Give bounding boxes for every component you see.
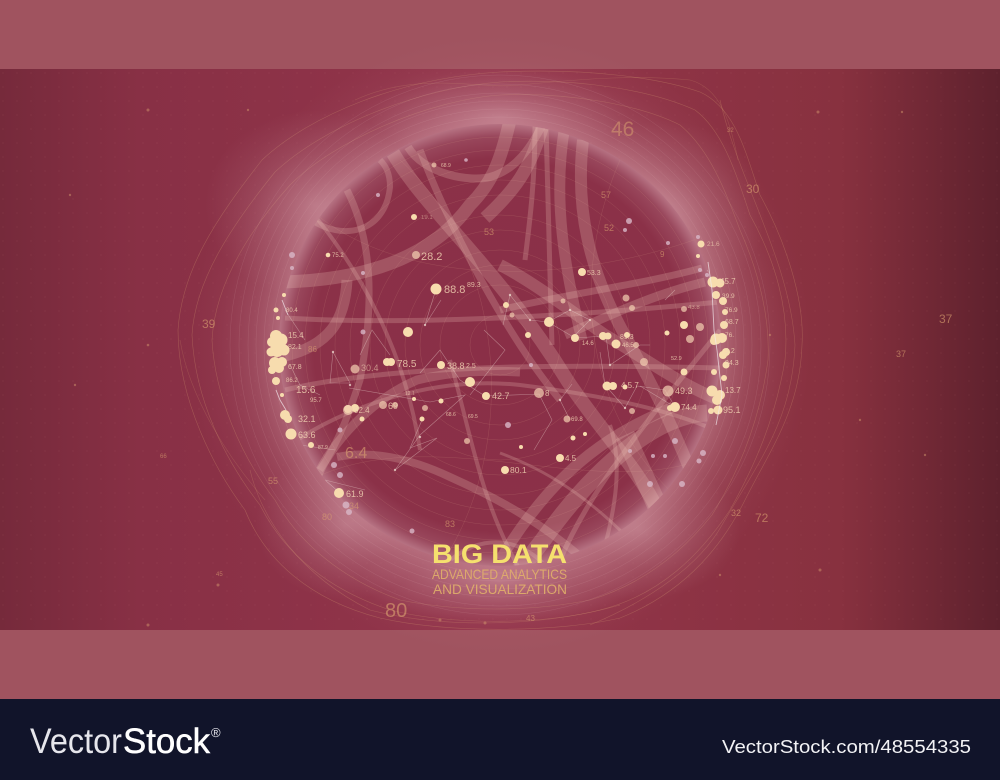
data labels: 95.1 xyxy=(723,405,741,415)
contour lines around sphere xyxy=(178,71,802,629)
data labels: 32.1 xyxy=(298,414,316,424)
small scattered specks xyxy=(69,108,926,626)
data labels: 87.9 xyxy=(318,445,328,451)
title block: Big Data xyxy=(432,539,567,597)
data labels: 80.1 xyxy=(510,465,527,475)
data labels: 30.4 xyxy=(361,363,379,373)
floating numbers: 32 xyxy=(727,128,734,134)
data nodes xyxy=(308,214,688,498)
data labels: 45.7 xyxy=(720,277,736,286)
data labels: 68.7 xyxy=(725,319,739,326)
data labels: 75.2 xyxy=(332,253,344,259)
footer bar xyxy=(0,699,1000,780)
data labels: 9.2 xyxy=(725,348,735,355)
footer logo: VectorStock xyxy=(30,722,221,761)
glow highlights xyxy=(205,70,765,622)
data labels: 68.6 xyxy=(446,412,456,418)
data labels: 76.9 xyxy=(725,307,738,314)
data labels: 39.9 xyxy=(722,293,735,300)
data labels: 76. xyxy=(725,332,734,339)
sparkle streaks on sphere edges xyxy=(276,262,722,425)
data labels: 4.5.7 xyxy=(621,381,639,390)
data labels: 8 xyxy=(545,389,550,398)
data labels: 38.8 xyxy=(447,361,465,371)
floating numbers: 37 xyxy=(896,349,906,359)
network links xyxy=(275,270,716,493)
data labels: 78.5 xyxy=(397,359,417,370)
floating numbers: 72 xyxy=(755,511,769,525)
floating numbers: 83 xyxy=(445,519,455,529)
sphere interior xyxy=(275,120,740,570)
floating numbers: 53 xyxy=(484,227,494,237)
floating numbers: 39 xyxy=(202,317,216,331)
data labels: 80.4 xyxy=(286,308,298,314)
footer logo: VectorStock: ® xyxy=(211,725,221,740)
data labels xyxy=(286,163,741,499)
data labels: 13.7 xyxy=(725,386,741,395)
data labels: 52.9 xyxy=(671,356,682,362)
floating numbers: 86 xyxy=(308,345,317,354)
data labels: 28.2 xyxy=(421,251,442,263)
data labels: 63.6 xyxy=(298,430,316,440)
data labels: 88.8 xyxy=(444,284,465,296)
data labels: 2.5 xyxy=(466,363,476,370)
data labels: 15.6 xyxy=(296,385,316,396)
data labels: 49.3 xyxy=(675,386,693,396)
data labels: 95.7 xyxy=(310,398,322,404)
floating numbers: 66 xyxy=(160,454,167,460)
floating numbers: 55 xyxy=(268,476,278,486)
data labels: 94.3 xyxy=(725,360,739,367)
curved translucent bands xyxy=(283,120,740,570)
footer image id: VectorStock.com/48554335 xyxy=(722,737,971,757)
subtitle: AND VISUALIZATION xyxy=(433,581,567,597)
data labels: 42.7 xyxy=(492,391,510,401)
floating numbers: 43 xyxy=(526,614,535,623)
data labels: 12.1 xyxy=(405,391,415,397)
data labels: 4.5 xyxy=(565,454,577,463)
floating numbers: 34 xyxy=(349,501,359,511)
data labels: 53.3 xyxy=(587,270,601,277)
data labels: 67.8 xyxy=(288,364,302,371)
data labels: 15.4 xyxy=(288,331,304,340)
data labels: 43.8 xyxy=(688,305,700,311)
data labels: 14.6 xyxy=(582,341,594,347)
floating numbers: 52 xyxy=(604,223,614,233)
data labels: 69.8 xyxy=(571,417,583,423)
sphere body xyxy=(279,124,721,566)
thin arcs xyxy=(292,137,720,553)
subtitle: ADVANCED ANALYTICS xyxy=(432,566,567,582)
main background panel xyxy=(0,69,1000,630)
floating numbers: 80 xyxy=(322,512,332,522)
data labels: 92.4 xyxy=(354,406,370,415)
floating numbers: 32 xyxy=(731,508,741,518)
pale lilac nodes xyxy=(289,158,709,533)
footer logo: VectorStock: Vector xyxy=(30,722,122,761)
data labels: 61.9 xyxy=(346,489,364,499)
footer logo: VectorStock: Stock xyxy=(123,722,210,761)
floating numbers: 30 xyxy=(746,182,760,196)
data labels: 19.1 xyxy=(421,215,433,221)
floating numbers: 37 xyxy=(939,312,953,326)
data labels: 89.3 xyxy=(467,282,481,289)
floating numbers xyxy=(160,118,953,623)
floating numbers: 45 xyxy=(216,572,223,578)
floating numbers: 80 xyxy=(385,600,407,622)
sphere glow xyxy=(190,35,810,655)
top banner strip xyxy=(0,0,1000,69)
data labels: 68.9 xyxy=(441,163,451,169)
data labels: 46.5 xyxy=(622,343,634,349)
data labels: 89.3 xyxy=(620,334,634,341)
floating numbers: 9 xyxy=(660,250,665,259)
faded nodes xyxy=(343,162,704,444)
data labels: 69.5 xyxy=(468,414,478,420)
title block: Big Data: BIG DATA xyxy=(432,539,567,569)
data labels: 74.4 xyxy=(681,403,697,412)
bottom banner strip xyxy=(0,630,1000,699)
data labels: 21.6 xyxy=(707,241,720,248)
right edge cluster xyxy=(696,240,730,414)
subtitle xyxy=(432,566,567,597)
data labels: 69 xyxy=(388,401,398,411)
floating numbers: 46 xyxy=(611,118,634,141)
data labels: 86.2 xyxy=(286,378,298,384)
left edge cluster xyxy=(266,293,296,440)
floating numbers: 6.4 xyxy=(345,445,367,462)
floating numbers: 57 xyxy=(601,190,611,200)
data labels: 82.1 xyxy=(288,344,302,351)
